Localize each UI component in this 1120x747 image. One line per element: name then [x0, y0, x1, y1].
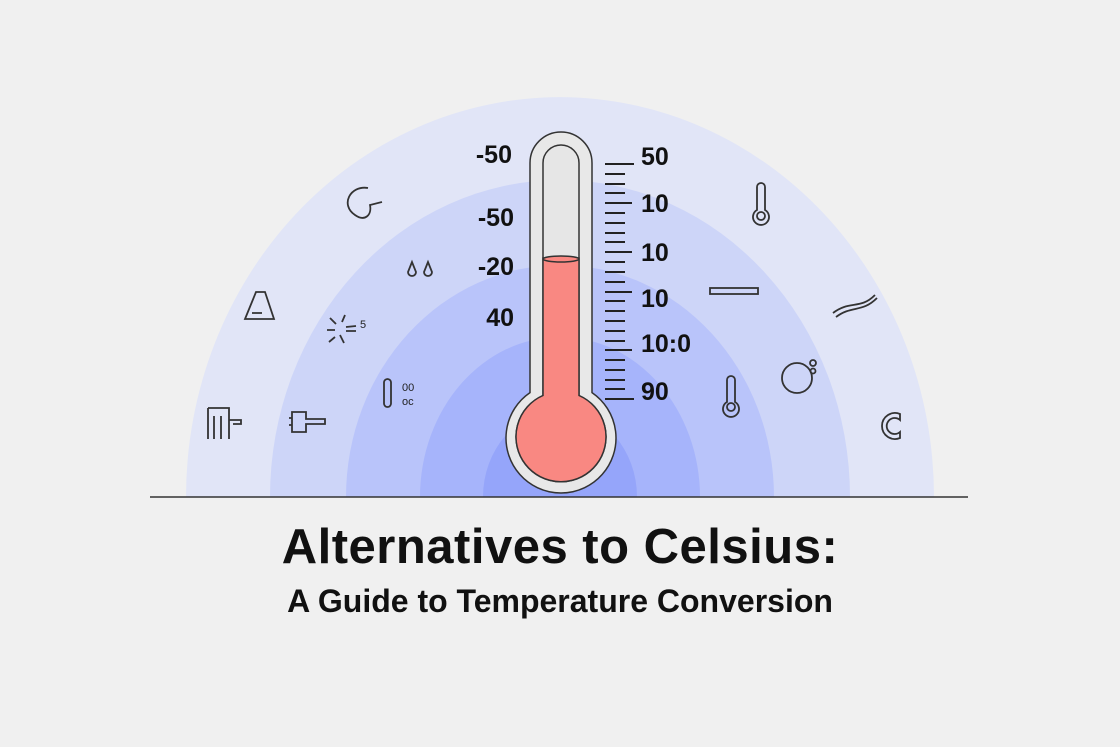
tick scale [605, 164, 634, 399]
main illustration: 00 [402, 382, 414, 394]
right labels: 10 [641, 190, 669, 218]
right labels: 10 [641, 239, 669, 267]
right labels: 50 [641, 143, 669, 171]
left labels: 40 [486, 304, 514, 332]
main illustration: oc [402, 396, 414, 408]
title: Alternatives to Celsius: [282, 520, 838, 574]
subtitle: A Guide to Temperature Conversion [287, 583, 833, 619]
left labels [476, 141, 514, 332]
left labels: -50 [478, 204, 514, 232]
small icons [208, 183, 900, 439]
left labels: -20 [478, 253, 514, 281]
background rings [186, 97, 934, 497]
right labels [641, 143, 691, 406]
left labels: -50 [476, 141, 512, 169]
right labels: 90 [641, 378, 669, 406]
right labels: 10 [641, 285, 669, 313]
main illustration: 5 [360, 319, 366, 331]
right labels: 10:0 [641, 330, 691, 358]
thermometer [506, 132, 616, 493]
